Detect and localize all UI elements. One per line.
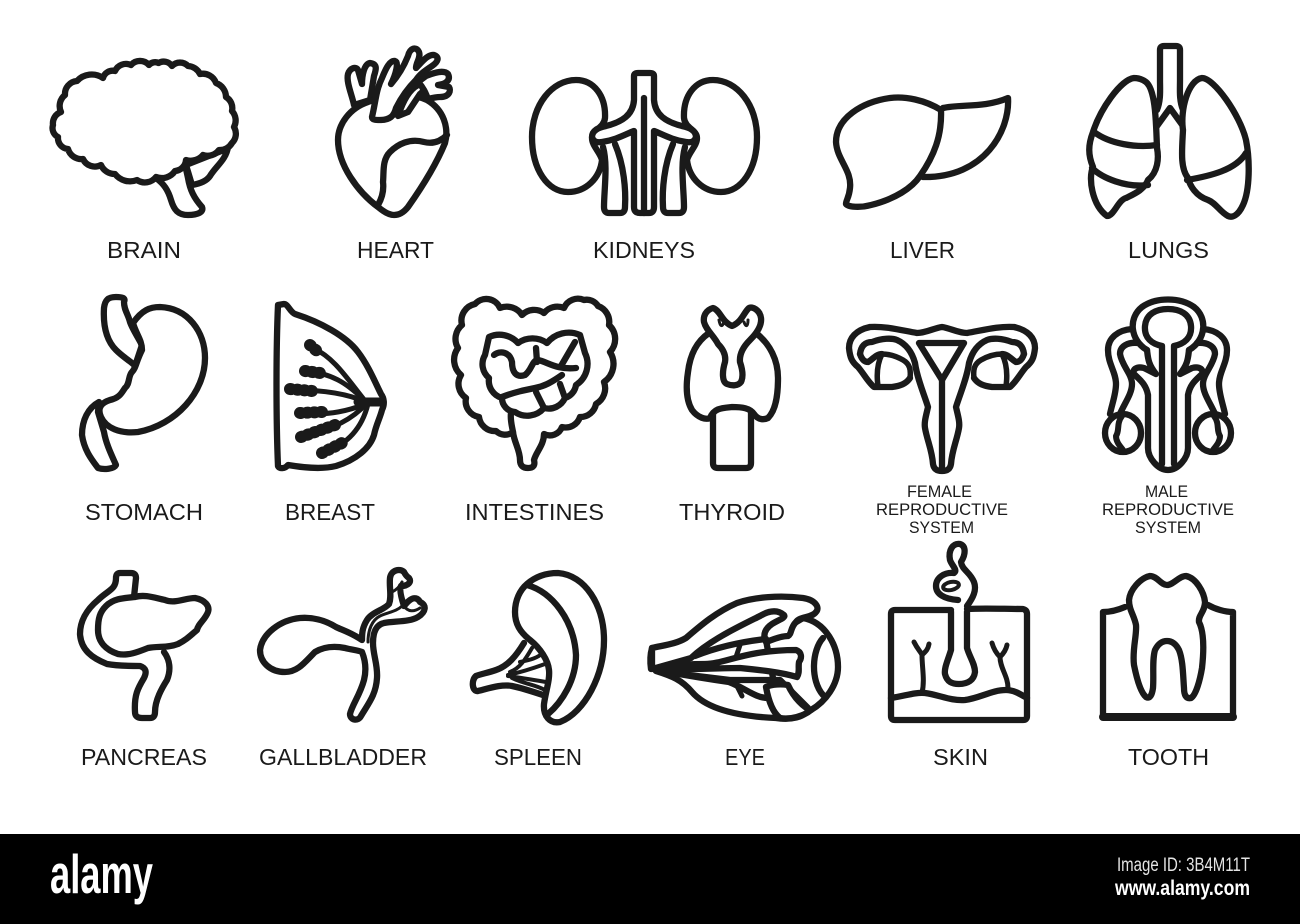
- panel: gallbladder: [259, 570, 427, 770]
- label: thyroid: THYROID: [679, 499, 785, 525]
- label: kidneys: KIDNEYS: [593, 237, 695, 263]
- label: tooth: TOOTH: [1128, 744, 1209, 770]
- outer ring: [1133, 300, 1203, 350]
- label: stomach: STOMACH: [85, 499, 203, 525]
- inner ring and urethra: [1145, 309, 1191, 464]
- label: female reproductive system: [876, 483, 1008, 537]
- footer bar: [0, 834, 1300, 924]
- icon: breast: [276, 304, 384, 468]
- hair loop: [936, 544, 975, 606]
- panel: tooth: [1103, 576, 1233, 770]
- label: male reproductive system: SYSTEM: [1135, 519, 1201, 537]
- right lung: [1182, 78, 1249, 217]
- lower band: [656, 671, 808, 719]
- label: male reproductive system: REPRODUCTIVE: [1102, 501, 1234, 519]
- ducts: [295, 348, 382, 452]
- panel: eye: [650, 597, 838, 770]
- icon: liver: [836, 98, 1008, 207]
- panel: skin: [891, 544, 1027, 770]
- spleen body: [515, 573, 604, 722]
- crown and roots: [1129, 576, 1205, 698]
- large intestine: [454, 299, 615, 468]
- label: eye: EYE: [725, 744, 765, 770]
- left lung: [1089, 78, 1158, 216]
- panel: pancreas: [80, 573, 208, 770]
- outline: [276, 304, 384, 468]
- icon: kidneys: [532, 73, 757, 213]
- label: male reproductive system: MALE: [1145, 483, 1188, 501]
- panel: thyroid: [679, 307, 785, 525]
- icon: lungs: [1089, 46, 1249, 217]
- glands: [914, 642, 929, 693]
- duodenum: [80, 573, 169, 718]
- icon: heart: [338, 49, 450, 215]
- label: female reproductive system: FEMALE: [907, 483, 972, 501]
- icon: eye: [650, 597, 838, 719]
- inner edge: [482, 333, 588, 416]
- panel: heart: [338, 49, 450, 263]
- gum box: [1103, 605, 1233, 717]
- label: liver: LIVER: [890, 237, 955, 263]
- panel: female reproductive system: [849, 327, 1035, 537]
- left fimbria: [860, 354, 882, 362]
- label: spleen: SPLEEN: [494, 744, 582, 770]
- right ovary: [974, 354, 1007, 386]
- label: intestines: INTESTINES: [465, 499, 604, 525]
- panel: brain: [53, 61, 236, 263]
- label: brain: BRAIN: [107, 237, 181, 263]
- body: [1133, 350, 1203, 470]
- label: heart: HEART: [357, 237, 434, 263]
- panel: liver: [836, 98, 1008, 263]
- hilum vessels: [473, 643, 546, 696]
- left testis: [1105, 414, 1141, 452]
- panel: breast: [276, 304, 384, 525]
- medial muscle: [660, 650, 801, 677]
- panel: lungs: [1089, 46, 1249, 263]
- small intestine: [494, 352, 576, 376]
- lower muscle: [668, 672, 768, 698]
- uterine cavity: [919, 343, 964, 380]
- panel: kidneys: [532, 73, 757, 263]
- right kidney: [684, 80, 757, 192]
- outer ducts: [1108, 329, 1132, 414]
- left kidney: [532, 80, 605, 192]
- label: female reproductive system: REPRODUCTIVE: [876, 501, 1008, 519]
- vessels: [592, 73, 696, 213]
- icon: skin: [891, 544, 1027, 720]
- icon: thyroid: [687, 307, 778, 468]
- left ovary: [877, 354, 910, 386]
- image id: Image ID: 3B4M11T: [1117, 855, 1250, 876]
- superior muscle: [652, 597, 817, 669]
- icon: gallbladder: [260, 570, 425, 720]
- esophagus: [104, 297, 142, 366]
- label: skin: SKIN: [933, 744, 988, 770]
- cartilage: [704, 307, 761, 385]
- icon: female reproductive system: [849, 327, 1035, 471]
- icon: tooth: [1103, 576, 1233, 717]
- uterus body: [860, 339, 1024, 471]
- follicle: [945, 612, 975, 684]
- logo: alamy: alamy: [50, 843, 153, 905]
- panel: male reproductive system: [1102, 300, 1234, 537]
- label: pancreas: PANCREAS: [81, 744, 207, 770]
- lobes: [687, 333, 778, 419]
- outer tubes: [849, 327, 1035, 387]
- trachea: [1157, 46, 1183, 110]
- label: gallbladder: GALLBLADDER: [259, 744, 427, 770]
- pancreas body: [98, 596, 208, 655]
- icon: intestines: [454, 299, 615, 468]
- icon: stomach: [82, 297, 205, 469]
- lobules: [290, 345, 346, 453]
- right fimbria: [1002, 354, 1024, 362]
- label: female reproductive system: SYSTEM: [909, 519, 974, 537]
- right testis: [1195, 414, 1231, 452]
- panel: intestines: [454, 299, 615, 525]
- website: www.alamy.com: [1114, 877, 1250, 900]
- body: [99, 307, 205, 432]
- icon: brain: [53, 61, 236, 215]
- second upper line: [695, 639, 766, 656]
- skin block: [891, 609, 1027, 720]
- label: lungs: LUNGS: [1128, 237, 1209, 263]
- left tip: [650, 648, 652, 669]
- globe: [766, 618, 838, 716]
- icon: pancreas: [80, 573, 208, 718]
- panel: stomach: [82, 297, 205, 525]
- duodenum: [82, 402, 116, 469]
- label: male reproductive system: [1102, 483, 1234, 537]
- label: breast: BREAST: [285, 499, 375, 525]
- ureters: [603, 144, 625, 213]
- icon: spleen: [473, 573, 604, 722]
- trachea: [713, 412, 751, 468]
- icon: male reproductive system: [1105, 300, 1231, 470]
- panel: spleen: [473, 573, 604, 770]
- dermis line: [891, 690, 1027, 700]
